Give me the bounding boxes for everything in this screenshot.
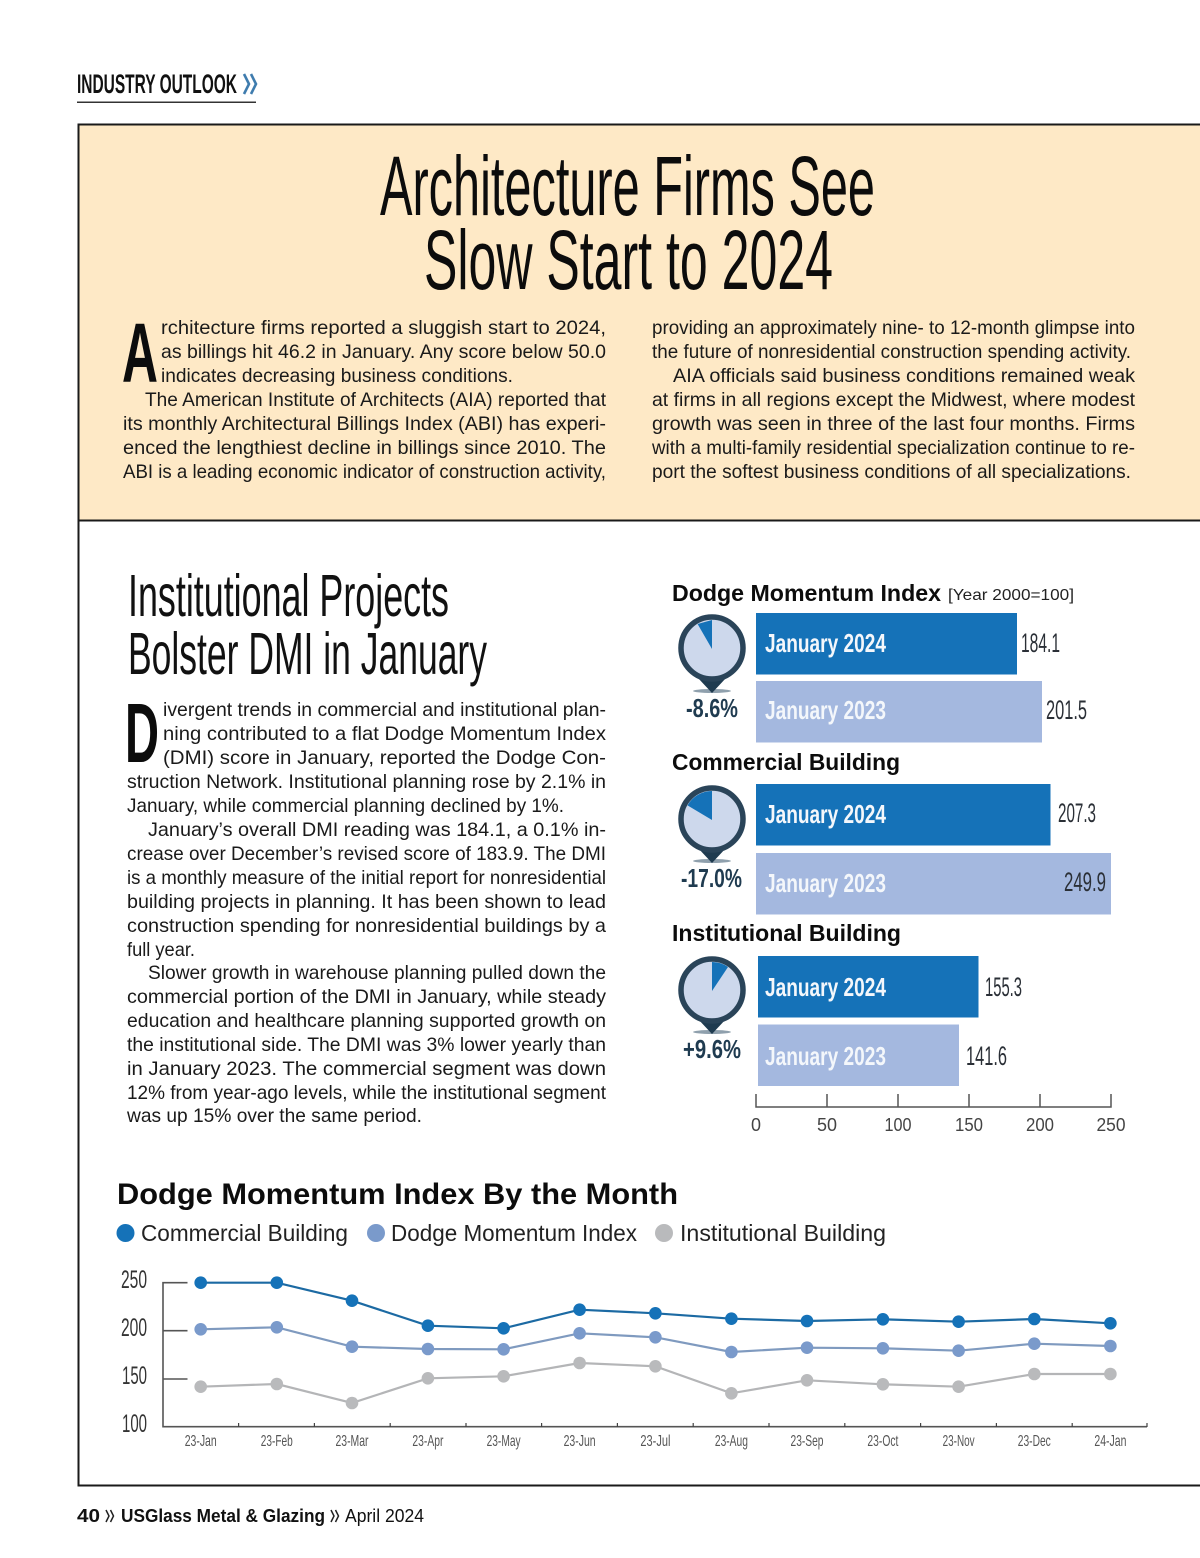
heading: Dodge Momentum Index bbox=[672, 580, 1074, 606]
chart axes: 250 bbox=[121, 1266, 147, 1294]
bar chart axis: 250 bbox=[1096, 1114, 1126, 1135]
text block: DMI article: was up 15% over the same period. bbox=[126, 1105, 422, 1127]
heading: Dodge Momentum Index: [Year 2000=100] bbox=[948, 587, 1074, 604]
text block: intro left column: as billings hit 46.2 in January. Any score below 50.0 bbox=[161, 341, 606, 363]
series: Institutional Building bbox=[194, 1357, 1117, 1409]
text block: DMI article: struction Network. Institutional planning rose by 2.1% in bbox=[127, 771, 606, 793]
value: 201.5: 201.5 bbox=[1046, 695, 1087, 725]
chart axes: 23-Mar bbox=[336, 1433, 369, 1450]
text block: intro right column: at firms in all regions except the Midwest, where modest bbox=[652, 389, 1136, 411]
chart axes: 23-Jan bbox=[185, 1433, 217, 1450]
footer: 40 bbox=[77, 1506, 100, 1526]
bar chart axis: 50 bbox=[817, 1114, 837, 1135]
text block: DMI article: 12% from year-ago levels, while the institutional segment bbox=[127, 1082, 607, 1104]
heading: Institutional Projects: Bolster DMI in January bbox=[128, 621, 487, 687]
bar chart axis: 150 bbox=[955, 1114, 983, 1135]
chart axes: 23-Nov bbox=[943, 1433, 975, 1450]
bar chart axis: 100 bbox=[884, 1114, 912, 1135]
heading: Institutional Building: Institutional Building bbox=[672, 920, 901, 946]
chart axes: 23-Aug bbox=[715, 1433, 748, 1450]
panel: Institutional Building bars bbox=[672, 920, 1022, 1086]
footer bbox=[77, 1506, 424, 1526]
bar: January 2023: January 2023 bbox=[765, 868, 886, 898]
text block: intro right column: the future of nonresidential construction spending activity. bbox=[652, 341, 1131, 363]
line chart bbox=[121, 1266, 1147, 1450]
section header: Industry Outlook: INDUSTRY OUTLOOK bbox=[77, 69, 237, 99]
bar: January 2024 bbox=[756, 784, 1050, 846]
chart axes: 23-Oct bbox=[867, 1433, 899, 1450]
panel: Commercial Building bars bbox=[672, 749, 1111, 914]
heading: Dodge Momentum Index: Dodge Momentum Index bbox=[672, 580, 941, 606]
text block: DMI article: construction spending for nonresidential buildings by a bbox=[127, 915, 606, 937]
icon: pin gauge +9.6% bbox=[681, 959, 743, 1034]
text block: intro left column: A bbox=[122, 306, 158, 400]
series: Dodge Momentum Index bbox=[194, 1321, 1117, 1358]
title: Slow Start to 2024 bbox=[424, 213, 833, 307]
panel: Dodge Momentum Index bars bbox=[672, 580, 1087, 742]
bar: January 2024: January 2024 bbox=[765, 799, 886, 829]
chart axes: 23-Jun bbox=[564, 1433, 596, 1450]
text block: intro left column: ABI is a leading economic indicator of construction activity, bbox=[123, 461, 606, 483]
chart axes: 100 bbox=[122, 1410, 147, 1438]
legend: Institutional Building bbox=[680, 1220, 886, 1246]
label: -8.6%: -8.6% bbox=[686, 693, 738, 723]
chart axes: 23-Apr bbox=[412, 1433, 444, 1450]
legend: Dodge Momentum Index bbox=[391, 1220, 637, 1246]
text block: DMI article: building projects in planning. It has been shown to lead bbox=[127, 891, 606, 913]
heading: Institutional Projects bbox=[128, 563, 487, 687]
chart axes: 23-Feb bbox=[261, 1433, 293, 1450]
bar: January 2024 bbox=[756, 613, 1017, 674]
value: 184.1: 184.1 bbox=[1021, 628, 1060, 658]
text block: DMI article: ivergent trends in commercial and institutional plan- bbox=[163, 699, 606, 721]
text block: intro right column: with a multi-family residential specialization continue to re- bbox=[651, 437, 1135, 459]
text block: intro left column bbox=[122, 306, 607, 483]
chart axes: 23-Sep bbox=[790, 1433, 824, 1450]
footer: USGlass Metal & Glazing bbox=[121, 1506, 325, 1526]
text block: intro left column: indicates decreasing business conditions. bbox=[161, 365, 513, 387]
text block: intro right column bbox=[651, 317, 1136, 483]
chart axes bbox=[121, 1266, 1147, 1450]
text block: DMI article: January’s overall DMI reading was 184.1, a 0.1% in- bbox=[148, 819, 606, 841]
text block: intro right column: growth was seen in three of the last four months. Firms bbox=[652, 413, 1135, 435]
text block: DMI article: commercial portion of the DMI in January, while steady bbox=[127, 986, 606, 1008]
text block: DMI article: D bbox=[125, 686, 159, 780]
text block: DMI article: the institutional side. The DMI was 3% lower yearly than bbox=[127, 1034, 606, 1056]
heading: Commercial Building: Commercial Building bbox=[672, 749, 900, 775]
value: 155.3: 155.3 bbox=[985, 972, 1022, 1002]
series: Commercial Building bbox=[194, 1276, 1117, 1335]
bar: January 2023 bbox=[758, 1024, 959, 1086]
bar: January 2023: January 2023 bbox=[765, 1041, 886, 1071]
chart axes: 23-Dec bbox=[1018, 1433, 1051, 1450]
icon: pin gauge -17.0% bbox=[681, 788, 743, 863]
text block: DMI article: Slower growth in warehouse planning pulled down the bbox=[148, 962, 606, 984]
bar: January 2024: January 2024 bbox=[765, 628, 886, 658]
icon: pin gauge -8.6% bbox=[681, 617, 743, 693]
text block: intro left column: The American Institute of Architects (AIA) reported that bbox=[145, 389, 607, 411]
text block: DMI article: January, while commercial planning declined by 1%. bbox=[127, 795, 564, 817]
text block: DMI article bbox=[125, 686, 607, 1127]
chart axes: 200 bbox=[121, 1314, 147, 1342]
bar chart axis bbox=[751, 1094, 1126, 1135]
bar: January 2024: January 2024 bbox=[765, 972, 886, 1002]
chart axes: 23-Jul bbox=[640, 1433, 670, 1450]
text block: intro right column: providing an approximately nine- to 12-month glimpse into bbox=[652, 317, 1135, 339]
text block: DMI article: in January 2023. The commercial segment was down bbox=[127, 1058, 606, 1080]
chart axes: 24-Jan bbox=[1094, 1433, 1126, 1450]
text block: intro left column: its monthly Architectural Billings Index (ABI) has experi- bbox=[123, 413, 606, 435]
section header: Industry Outlook bbox=[77, 69, 256, 103]
bar: January 2023 bbox=[756, 853, 1111, 914]
bar chart axis: 0 bbox=[751, 1114, 761, 1135]
text block: DMI article: crease over December’s revised score of 183.9. The DMI bbox=[127, 843, 606, 865]
text block: intro left column: enced the lengthiest decline in billings since 2010. The bbox=[123, 437, 606, 459]
text block: DMI article: full year. bbox=[127, 939, 195, 961]
heading: Institutional Projects: Institutional Projects bbox=[128, 563, 449, 629]
text block: DMI article: is a monthly measure of the initial report for nonresidential bbox=[127, 867, 606, 889]
text block: DMI article: ning contributed to a flat Dodge Momentum Index bbox=[163, 723, 606, 745]
label: -17.0%: -17.0% bbox=[681, 863, 742, 893]
bar: January 2023 bbox=[756, 681, 1042, 742]
text block: DMI article: education and healthcare planning supported growth on bbox=[127, 1010, 606, 1032]
bar: January 2024 bbox=[758, 956, 978, 1018]
chart axes: 150 bbox=[122, 1362, 147, 1390]
text block: intro right column: port the softest business conditions of all specializations. bbox=[652, 461, 1131, 483]
text block: DMI article: (DMI) score in January, reported the Dodge Con- bbox=[163, 747, 606, 769]
value: 207.3: 207.3 bbox=[1058, 798, 1096, 828]
bar: January 2023: 249.9 bbox=[1064, 867, 1106, 897]
footer: April 2024 bbox=[345, 1506, 424, 1526]
text block: intro right column: AIA officials said business conditions remained weak bbox=[673, 365, 1135, 387]
bar: January 2023: January 2023 bbox=[765, 695, 886, 725]
title bbox=[380, 139, 875, 307]
legend bbox=[116, 1220, 886, 1246]
label: +9.6%: +9.6% bbox=[683, 1034, 741, 1064]
text block: intro left column: rchitecture firms reported a sluggish start to 2024, bbox=[161, 317, 606, 339]
chart axes: 23-May bbox=[487, 1433, 521, 1450]
value: 141.6: 141.6 bbox=[966, 1041, 1007, 1071]
bar chart axis: 200 bbox=[1026, 1114, 1054, 1135]
legend: Commercial Building bbox=[141, 1220, 348, 1246]
heading: Dodge Momentum Index By the Month: Dodge Momentum Index By the Month bbox=[117, 1178, 678, 1211]
